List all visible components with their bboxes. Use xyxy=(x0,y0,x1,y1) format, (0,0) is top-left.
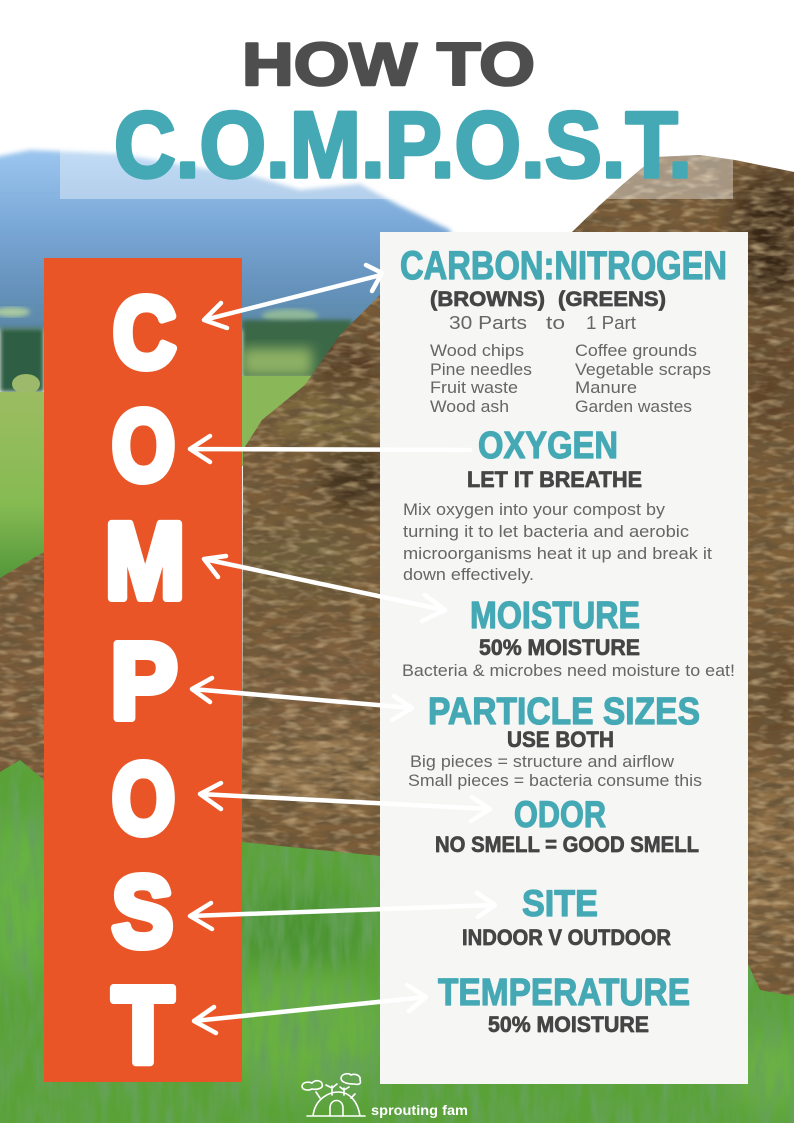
section: moisture: Bacteria & microbes need moisture to eat! xyxy=(402,661,735,680)
section: carbon nitrogen: Manure xyxy=(575,378,637,397)
section: carbon nitrogen: to xyxy=(546,313,565,333)
acronym letters: P xyxy=(110,620,178,741)
section: oxygen: microorganisms heat it up and break it xyxy=(403,544,712,563)
section: carbon nitrogen: (GREENS) xyxy=(558,288,666,311)
section: carbon nitrogen: Pine needles xyxy=(430,360,532,379)
section: particle sizes xyxy=(408,691,702,790)
section: carbon nitrogen: Garden wastes xyxy=(575,397,692,416)
section: particle sizes: Big pieces = structure and airflow xyxy=(410,752,675,771)
acronym letters xyxy=(105,277,185,1085)
section: site xyxy=(462,883,671,950)
section: carbon nitrogen xyxy=(400,244,727,416)
section: site: SITE xyxy=(522,883,598,924)
section: carbon nitrogen: (BROWNS) xyxy=(430,288,545,311)
section: temperature xyxy=(438,972,690,1037)
acronym letters: C xyxy=(113,277,176,389)
section: site: INDOOR V OUTDOOR xyxy=(462,925,671,950)
section: moisture: MOISTURE xyxy=(470,595,640,637)
section: oxygen: LET IT BREATHE xyxy=(467,467,642,492)
acronym letters: M xyxy=(105,500,185,621)
section: odor: ODOR xyxy=(514,794,606,835)
acronym letters: S xyxy=(112,856,173,968)
section: carbon nitrogen: Wood chips xyxy=(430,341,524,360)
section: particle sizes: USE BOTH xyxy=(507,727,614,752)
section: moisture: 50% MOISTURE xyxy=(479,635,640,660)
section: temperature: TEMPERATURE xyxy=(438,972,690,1014)
section: carbon nitrogen: Coffee grounds xyxy=(575,341,697,360)
section: oxygen: down effectively. xyxy=(403,565,534,584)
translucent title backing xyxy=(60,100,733,199)
section: carbon nitrogen: Fruit waste xyxy=(430,378,518,397)
section: oxygen: Mix oxygen into your compost by xyxy=(403,500,666,519)
section: carbon nitrogen: Wood ash xyxy=(430,397,509,416)
section: particle sizes: PARTICLE SIZES xyxy=(428,691,700,733)
section: odor xyxy=(435,794,699,857)
acronym letters: O xyxy=(112,743,175,855)
logo: sprouting fam xyxy=(302,1074,468,1118)
section: oxygen xyxy=(403,425,712,584)
title: C.O.M.P.O.S.T.: C.O.M.P.O.S.T. xyxy=(114,92,692,197)
section: temperature: 50% MOISTURE xyxy=(488,1012,649,1037)
panel: white explanation card xyxy=(380,232,748,1084)
logo: sprouting fam: sprouting fam xyxy=(371,1102,468,1118)
section: carbon nitrogen: 30 Parts xyxy=(449,313,527,333)
section: oxygen: turning it to let bacteria and aerobic xyxy=(403,522,690,541)
section: odor: NO SMELL = GOOD SMELL xyxy=(435,832,699,857)
acronym letters: O xyxy=(112,390,175,502)
section: particle sizes: Small pieces = bacteria consume this xyxy=(408,771,702,790)
section: oxygen: OXYGEN xyxy=(478,425,618,467)
title: how to: HOW TO xyxy=(242,31,535,98)
section: carbon nitrogen: CARBON:NITROGEN xyxy=(400,244,727,288)
section: moisture xyxy=(402,595,735,680)
section: carbon nitrogen: 1 Part xyxy=(586,313,636,333)
panel: orange acronym column xyxy=(44,258,242,1085)
section: carbon nitrogen: Vegetable scraps xyxy=(575,360,711,379)
acronym letters: T xyxy=(112,964,174,1085)
arrows linking letters to headings xyxy=(190,265,495,1033)
